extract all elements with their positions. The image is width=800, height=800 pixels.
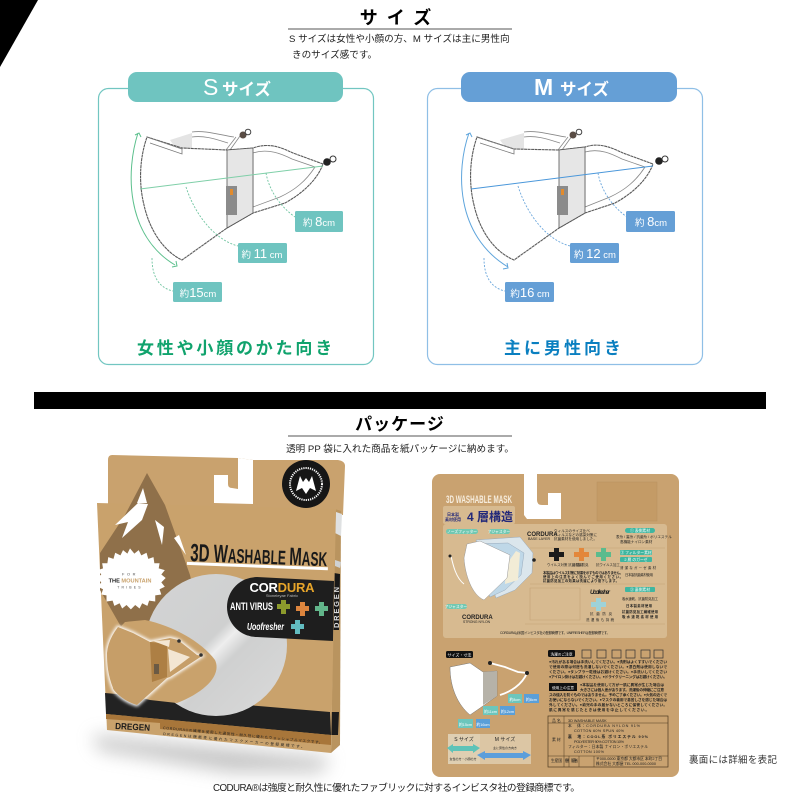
intro text: size xyxy=(289,33,510,61)
layer tags: アジャスター xyxy=(488,529,510,534)
layer body text: CORDURA xyxy=(462,615,493,621)
care section: ください。●タンブラー乾燥はお避けください。●手洗いしてください xyxy=(549,669,667,674)
antivirus crosses xyxy=(549,548,611,561)
corner triangle xyxy=(0,0,38,67)
care section: 肌に異常を感じたときは使用を中止してください。 xyxy=(549,707,649,712)
starburst badge xyxy=(97,548,166,609)
layer body text: Uoofresher xyxy=(590,590,611,596)
size section: 約12cm xyxy=(501,709,514,714)
size section: S サイズ xyxy=(454,736,474,743)
M size heading pill: M xyxy=(534,74,553,100)
intro text: package: 透明 PP 袋に入れた商品を紙パッケージに納めます。 xyxy=(286,443,514,455)
spec table: COTTON 60% SPUN 40% xyxy=(574,729,625,733)
M label 16cm: 約16 cm xyxy=(510,285,550,300)
four-layer heading: 日本製 xyxy=(447,511,459,517)
size section: 約8cm xyxy=(526,697,537,702)
cordura note: BASE LAYER xyxy=(528,537,551,541)
layer tags: アジャスター xyxy=(445,604,467,609)
layer body text: CORDURAは米国インビスタ社の登録商標です。UNIFRESHERは登録商標です。 xyxy=(500,630,610,635)
care section: お使いにならないでください。●マスクの着用で息苦しさを感じた場合は xyxy=(549,697,667,702)
layer body text: 吸水速乾、抗菌防臭加工 xyxy=(622,596,659,601)
starburst badge: THE MOUNTAIN xyxy=(109,578,151,584)
size section: 約11cm xyxy=(484,709,497,714)
drop shadow xyxy=(92,735,331,772)
brown band with logo xyxy=(106,714,331,749)
trademark note: CODURA®は強度と耐久性に優れたファブリックに対するインビスタ社の登録商標です。 xyxy=(213,781,580,794)
layer tags: ノーズフィッター xyxy=(447,529,477,534)
cordura note: ウィルスなどの感染対策に xyxy=(554,532,598,537)
layer panel xyxy=(443,524,667,638)
hook notch xyxy=(214,458,253,504)
feature panel: ANTI VIRUS xyxy=(230,601,273,613)
spec table: 生産国 xyxy=(551,758,562,763)
care section xyxy=(548,650,667,712)
S size heading pill xyxy=(128,72,343,102)
M label 12cm xyxy=(570,243,619,263)
spec table: 株式会社 大都屋 TEL 000-000-0000 xyxy=(596,761,656,766)
M label 8cm: 約 8cm xyxy=(635,214,667,229)
M height arc arrow xyxy=(462,133,508,269)
S size heading pill: サイズ xyxy=(222,79,272,99)
size section: 約16cm xyxy=(476,722,490,727)
care section: ●アイロン掛けはお避けください。●ドライクリーニングはお避けください。 xyxy=(549,674,667,679)
M label 8cm xyxy=(626,211,675,232)
heading: size: サイズ xyxy=(360,7,440,28)
back note: 裏面には詳細を表記 xyxy=(689,754,777,766)
S label 15cm xyxy=(173,282,222,302)
layer body text: 吸水速乾素材使用 xyxy=(622,614,659,619)
size section: M サイズ xyxy=(495,736,515,743)
layer tags: ② フィルター素材 xyxy=(620,550,652,555)
S label 11cm xyxy=(238,243,287,263)
layer tags: 2 層 のガーゼ xyxy=(624,557,648,562)
spec table: POLYESTER 90% COTTON 10% xyxy=(574,740,625,744)
feature panel: Uoofresher xyxy=(247,622,285,633)
hook notch xyxy=(524,472,561,519)
M mask diagram xyxy=(462,129,668,291)
layer body text: 日本製抗菌素材使用 xyxy=(625,572,653,577)
size section xyxy=(446,651,539,764)
spec table: 〒000-0000 東京都 大都市区 本町2丁目 xyxy=(596,756,662,761)
brown band with logo: DREGENは機能性に優れたマスクメーカーの登録商標です。 xyxy=(163,731,305,749)
layer body text: 本製品はウイルス対策に効果を示すものではありません。 xyxy=(543,570,623,575)
four-layer heading xyxy=(443,506,515,524)
M size heading pill: サイズ xyxy=(560,79,610,99)
spec table: 3D WASHABLE MASK xyxy=(568,719,607,723)
spec table xyxy=(548,716,668,767)
care section: で使用の際は何度も洗濯しないでください。●漂白剤は使用しないで xyxy=(549,664,667,669)
hang tab xyxy=(108,455,345,515)
side label: DREGEN xyxy=(332,587,341,628)
starburst badge: FOR xyxy=(122,571,138,576)
spec table: フィルター：日本製 ナイロン・ポリエステル xyxy=(568,744,648,749)
care section: スの侵入を防ぐものではありません。予めご了承ください。●火気の近くで xyxy=(549,692,667,697)
tan mask xyxy=(107,627,203,705)
S caption: 女性や小顔のかた向き xyxy=(137,339,335,358)
layer tags: ③ 裏側素材 xyxy=(630,587,650,592)
M caption: 主に男性向き xyxy=(504,339,624,358)
size section: 女性の方・小顔の方 xyxy=(449,756,477,761)
section divider bar xyxy=(34,392,766,409)
feature panel: CORDURA xyxy=(250,580,315,595)
side flap xyxy=(331,509,341,753)
size section: 主に男性の方向き xyxy=(493,745,517,750)
spec table: 販売者 xyxy=(571,758,578,763)
package front xyxy=(92,455,345,772)
brown band with logo: DREGEN xyxy=(115,721,150,733)
intro text: size: S サイズは女性や小顔の方、M サイズは主に男性向 xyxy=(289,33,510,45)
layer body text: 抗菌 防臭 xyxy=(574,562,589,567)
seal xyxy=(282,460,330,508)
feature panel: Stoneleyae Fabric xyxy=(266,593,298,598)
four-layer heading: 素材使用 xyxy=(445,516,461,522)
cordura note: 高機能ナイロン素材 xyxy=(620,539,653,544)
spec table: COTTON 100% xyxy=(574,750,605,754)
starburst badge: TRIBES xyxy=(117,585,143,589)
layer panel outlines xyxy=(525,548,665,624)
intro text: size: きのサイズ感です。 xyxy=(292,49,377,61)
layer body text: 清潔なガーゼ素材 xyxy=(620,565,657,570)
back title: 3D WASHABLE MASK xyxy=(446,494,512,506)
layer body text: STRONG NYLON xyxy=(463,620,491,624)
layer body text: 抗菌防臭 xyxy=(590,611,613,616)
layer body text xyxy=(462,562,659,635)
cordura note: 抗菌素材を使用しました。 xyxy=(554,536,597,541)
snow xyxy=(115,488,186,555)
care section: 大きさには個人差があります。洗濯後の伸縮にご注意 xyxy=(580,687,664,692)
M label 12cm: 約 12 cm xyxy=(574,246,616,261)
care section: 使用上の注意 xyxy=(552,685,574,690)
cordura note: CORDURA xyxy=(527,532,558,538)
tan lobe around mask xyxy=(108,620,217,703)
panel: S size xyxy=(98,72,374,364)
S size heading pill: S xyxy=(203,74,218,100)
mountain xyxy=(100,473,200,650)
emboss box xyxy=(597,482,657,521)
kraft card xyxy=(432,474,679,777)
feature panel xyxy=(227,577,334,641)
S height arc arrow xyxy=(131,133,177,267)
size section: 約15cm xyxy=(459,722,472,727)
size range chart xyxy=(448,734,480,764)
brown band with logo: CORDURA®の繊維を使用した通気性・耐久性に優れたウォッシャブルマスクです。 xyxy=(163,725,323,745)
layer tags xyxy=(445,528,655,609)
S width measure line xyxy=(140,166,323,189)
M size heading pill xyxy=(461,72,677,102)
black band xyxy=(105,693,331,735)
cordura note: ウィルスのサイズ比べ xyxy=(554,528,590,533)
package back xyxy=(432,472,679,777)
care section: ●本製品を使用して万が一肌に異常が生じた場合は xyxy=(580,682,664,687)
layer body text: ウイルス対策 抗菌 防臭 xyxy=(547,562,583,567)
cordura note: 表糸 / 裏糸 / 抗菌糸 / ポリエステル xyxy=(616,534,672,539)
layer tags: ① 表側素材 xyxy=(630,528,650,533)
spec table: 素 材 xyxy=(552,737,561,742)
M label 16cm xyxy=(505,282,554,302)
layer body text: 抗ウイルス加工 xyxy=(596,562,620,567)
spec table: 裏 地：COOL系 ポリエステル 90% xyxy=(568,734,649,739)
layer body text: 使用上の注意をよく読んでご使用ください。 xyxy=(543,574,623,579)
layer body text: 洗濯後も持続 xyxy=(586,617,615,622)
panel: M size xyxy=(428,72,702,364)
S label 11cm: 約 11 cm xyxy=(242,246,283,261)
back mask drawing xyxy=(490,663,527,695)
M width measure line xyxy=(471,166,653,189)
cordura note xyxy=(527,528,672,544)
layer body text: 日本製素材使用 xyxy=(626,603,653,608)
layer body text: 抗菌防臭加工繊維使用 xyxy=(622,609,659,614)
four-layer heading: 4 層構造 xyxy=(467,509,513,524)
clear window disc xyxy=(145,574,287,716)
spec table: 本 体：CORDURA NYLON 91% xyxy=(568,723,641,728)
S label 8cm xyxy=(295,211,343,232)
spec table: 品 名 xyxy=(552,718,561,723)
S label 8cm: 約 8cm xyxy=(303,214,335,229)
size section: 約8cm xyxy=(510,697,520,702)
layered mask xyxy=(448,537,536,600)
product title: 3D WASHABLE MASK xyxy=(190,539,328,572)
S mask diagram xyxy=(131,129,336,291)
spec table: 中国 xyxy=(565,758,569,763)
heading: package: パッケージ xyxy=(355,415,445,434)
care section: 洗濯のご注意 xyxy=(550,652,573,656)
layer body text: 抗菌防臭加工の効果は洗濯により低下します。 xyxy=(543,578,619,583)
S label 15cm: 約15cm xyxy=(180,285,216,300)
care section: 外してください。●幼児の手の届かないところに保管してください。 xyxy=(549,702,667,707)
size section: サイズ・寸法 xyxy=(448,652,471,658)
care section: ●汚れがある場合は手洗いしてください。●洗剤はよくすすいでください xyxy=(549,659,667,664)
front face xyxy=(97,503,336,753)
